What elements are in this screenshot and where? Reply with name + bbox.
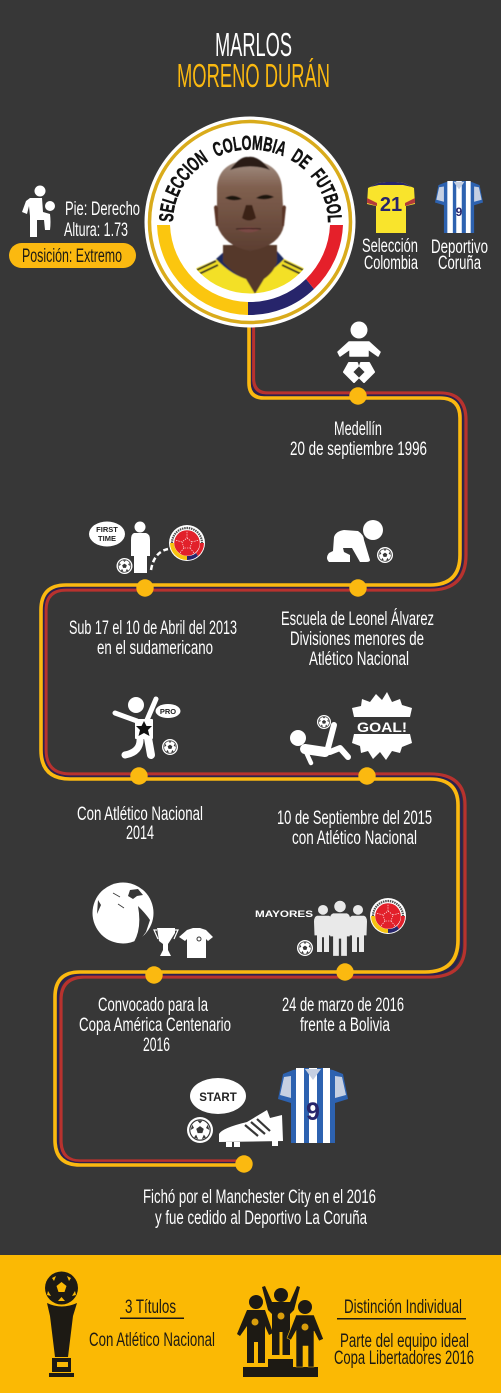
timeline path	[41, 322, 466, 1165]
milestone: Escuela	[281, 609, 434, 670]
title	[177, 26, 330, 94]
milestone: debut with seniors	[282, 995, 404, 1036]
icon: senior squad and crest: MAYORES	[255, 909, 313, 920]
icon: overhead kick and goal badge: GOAL!	[357, 719, 407, 735]
badge with player portrait	[144, 116, 356, 328]
team labels: Selección	[362, 236, 418, 257]
milestone: Copa América: 2016	[143, 1035, 170, 1056]
milestone: Medellín: 20 de septiembre 1996	[290, 439, 427, 460]
icon: first time call-up: FIRST	[96, 525, 118, 534]
milestone: Manchester City transfer: y fue cedido al Deportivo La Coruña	[155, 1208, 367, 1229]
icon: pro player celebrating	[115, 697, 180, 755]
jersey: Deportivo Coruña: 9	[456, 205, 463, 219]
position pill: Posición: Extremo	[22, 246, 122, 267]
milestone: Escuela: Escuela de Leonel Álvarez	[281, 609, 434, 630]
icon: medal podium	[237, 1286, 324, 1377]
milestone: Sub 17: en el sudamericano	[97, 638, 213, 659]
milestone: Manchester City transfer	[143, 1187, 376, 1229]
foot and height text: Pie: Derecho	[65, 199, 140, 220]
jersey: Selección Colombia: 21	[380, 194, 402, 216]
jersey: Deportivo Coruña	[435, 181, 483, 233]
titles text	[89, 1297, 215, 1351]
icon: start bubble, ball, boot and jersey: 9	[306, 1098, 320, 1126]
milestone: Escuela: Atlético Nacional	[309, 649, 409, 670]
icon: first time call-up	[89, 522, 205, 574]
icon: overhead kick and goal badge	[290, 692, 412, 763]
milestone: Sub 17: Sub 17 el 10 de Abril del 2013	[69, 618, 237, 639]
milestone: Copa América: Convocado para la	[98, 995, 208, 1016]
badge lettering: SELECCION COLOMBIA DE FUTBOL	[158, 136, 342, 222]
milestone: debut with seniors: 24 de marzo de 2016	[282, 995, 404, 1016]
icon: ball trophy	[45, 1272, 78, 1377]
milestone: Medellín: Medellín	[334, 419, 382, 440]
icon: player juggling ball	[22, 186, 55, 237]
jersey: Selección Colombia	[367, 182, 415, 233]
milestones markers	[130, 387, 376, 1173]
milestone: Manchester City transfer: Fichó por el Manchester City en el 2016	[143, 1187, 376, 1208]
distinction text	[334, 1297, 474, 1369]
titles text: Con Atlético Nacional	[89, 1330, 215, 1351]
player portrait	[196, 156, 304, 294]
milestone: Sub 17	[69, 618, 237, 659]
icon: globe, trophy and shirt	[92, 882, 213, 958]
milestone: Medellín	[290, 419, 427, 460]
icon: senior squad and crest	[255, 898, 406, 956]
milestone: first goal	[277, 808, 432, 849]
milestone: debut with seniors: frente a Bolivia	[300, 1015, 390, 1036]
icon: pro player celebrating: PRO	[160, 707, 176, 716]
icon: start bubble, ball, boot and jersey	[187, 1068, 348, 1147]
icon: first time call-up: TIME	[98, 534, 116, 543]
team labels: Colombia	[364, 253, 418, 274]
title: MORENO DURÁN	[177, 57, 330, 94]
titles text: 3 Títulos	[125, 1297, 176, 1318]
milestone: first goal: con Atlético Nacional	[292, 828, 417, 849]
milestone: Copa América	[79, 995, 231, 1056]
milestone: first goal: 10 de Septiembre del 2015	[277, 808, 432, 829]
foot and height text: Altura: 1.73	[64, 220, 128, 241]
title: MARLOS	[215, 26, 292, 63]
tricolour arc	[157, 225, 343, 315]
foot and height text	[64, 199, 140, 241]
team labels: Coruña	[438, 253, 481, 274]
panel: honours	[0, 1255, 501, 1393]
milestone: Con Atlético Nacional 2014: 2014	[126, 823, 154, 844]
milestone: Con Atlético Nacional 2014	[77, 804, 203, 844]
milestone: Escuela: Divisiones menores de	[290, 629, 424, 650]
milestone: Copa América: Copa América Centenario	[79, 1015, 231, 1036]
icon: crawling baby	[327, 520, 393, 563]
player facts	[9, 186, 140, 268]
icon: start bubble, ball, boot and jersey: START	[199, 1092, 237, 1104]
icon: baby	[338, 322, 380, 382]
milestone: Con Atlético Nacional 2014: Con Atlético Nacional	[77, 804, 203, 825]
team labels	[362, 236, 488, 274]
